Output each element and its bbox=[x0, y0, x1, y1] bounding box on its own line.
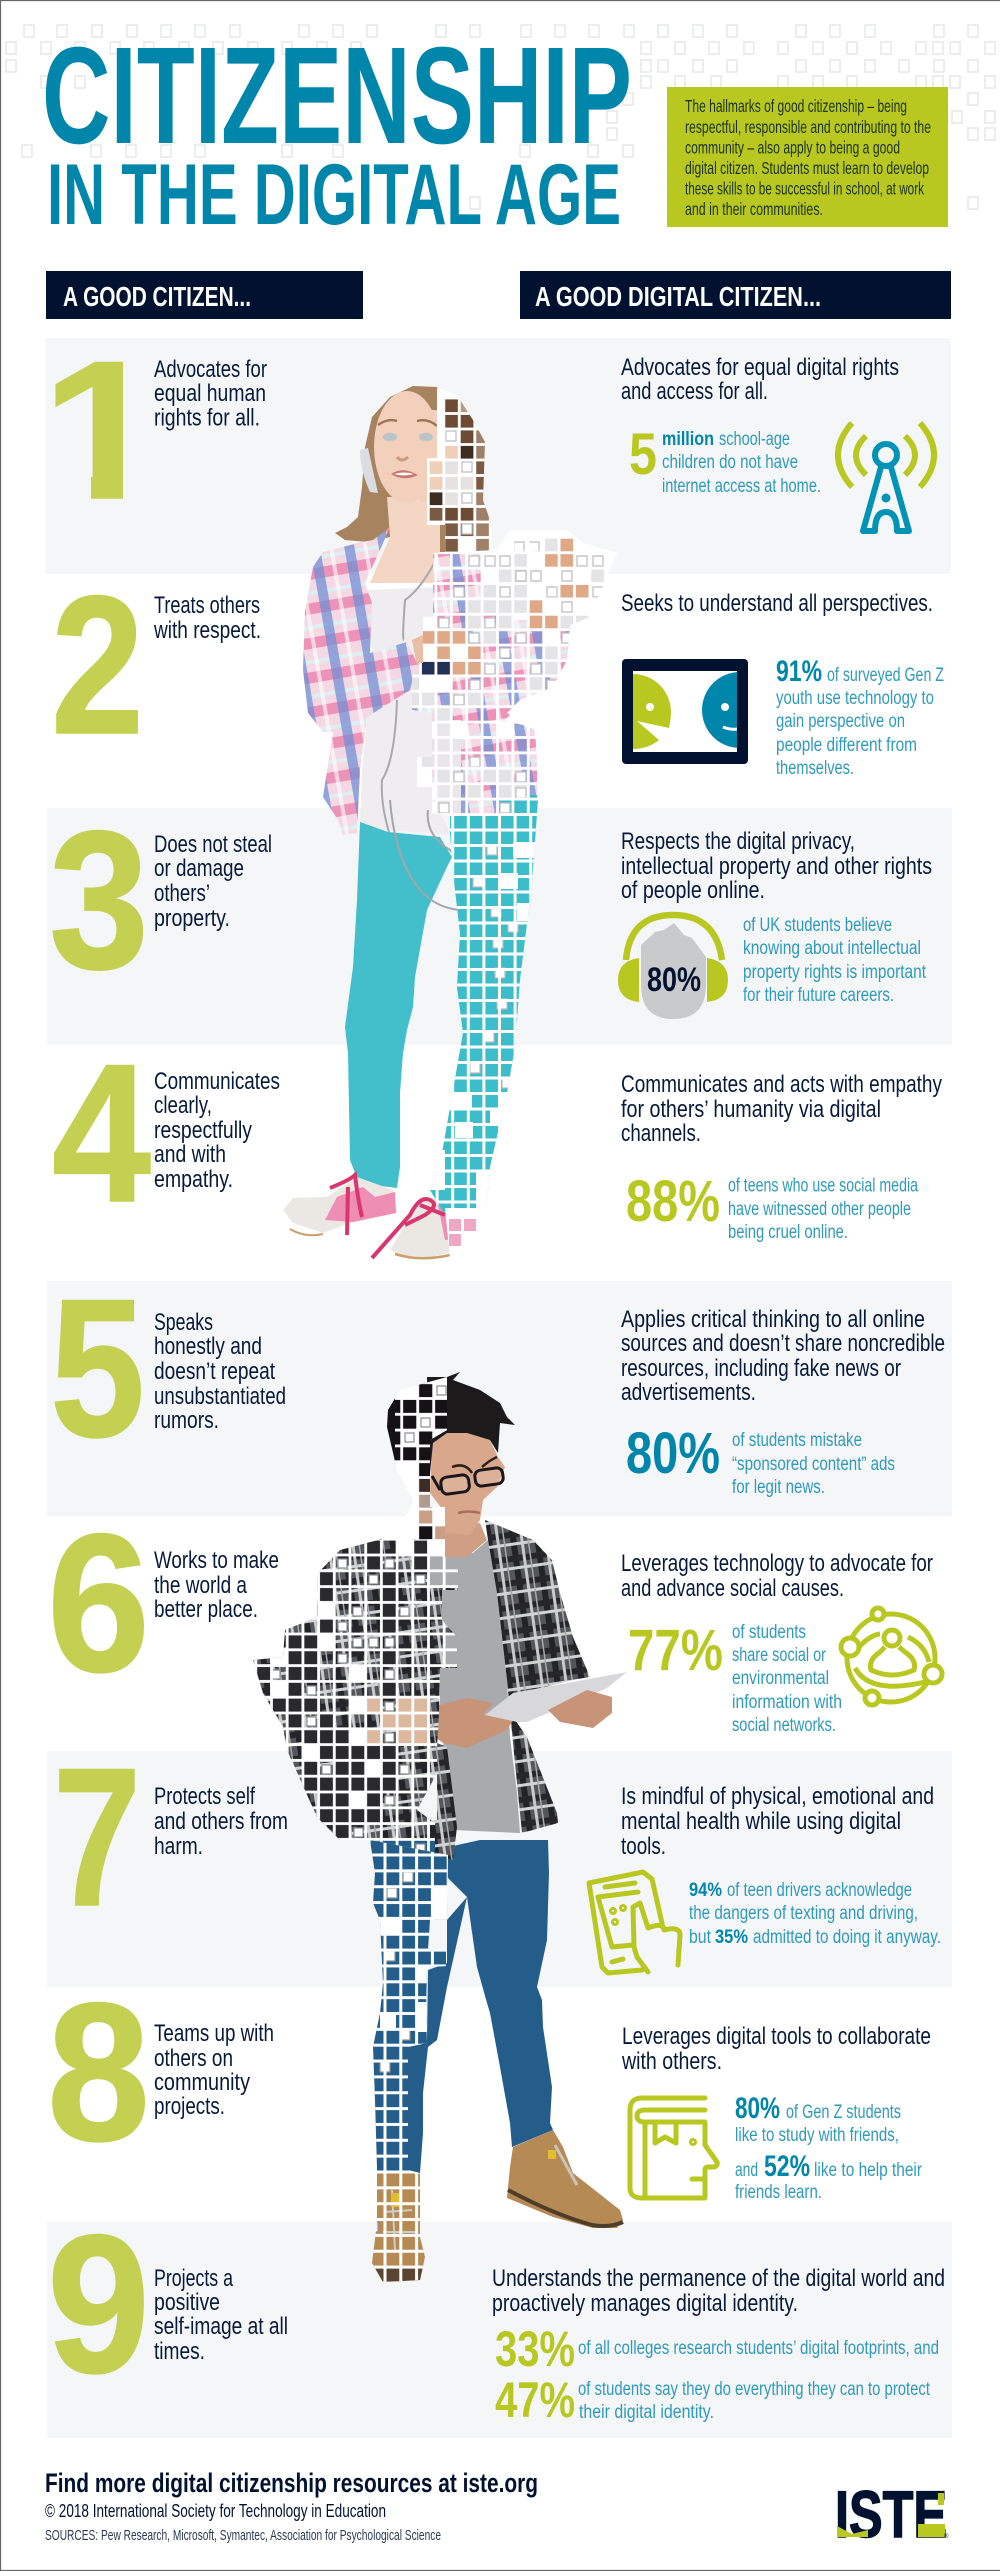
panel: item 2 digital citizen: youth use technology to bbox=[776, 688, 934, 709]
panel: item 4 good citizen: and with bbox=[154, 1141, 226, 1168]
panel: item 8 digital citizen: Leverages digital tools to collaborate bbox=[622, 2023, 931, 2050]
panel: item 1 digital citizen: and access for all. bbox=[621, 378, 768, 405]
panel: item 9 good citizen: Projects a bbox=[154, 2265, 233, 2292]
panel: item 8 digital citizen: 80% bbox=[735, 2092, 780, 2125]
panel: item 3 good citizen: or damage bbox=[154, 855, 244, 882]
panel: item 3 digital citizen: intellectual property and other rights bbox=[621, 853, 932, 880]
girl right shoe bbox=[372, 1197, 485, 1258]
tablet bbox=[485, 1672, 627, 1722]
row background bands bbox=[46, 338, 952, 2438]
icon: social network bbox=[841, 1608, 942, 1705]
footer text: Find more digital citizenship resources at iste.org bbox=[45, 2468, 538, 2498]
panel: item 3 digital citizen: for their future careers. bbox=[743, 985, 894, 1006]
panel: item 8 digital citizen: like to help their bbox=[814, 2160, 923, 2181]
panel: item 3 good citizen: 3 bbox=[49, 790, 149, 1010]
girl hair bbox=[335, 386, 445, 552]
panel: item 1 digital citizen: school-age bbox=[719, 429, 790, 450]
footer text: © 2018 International Society for Technology in Education bbox=[45, 2501, 386, 2521]
icon: tablet with two faces bbox=[622, 659, 748, 764]
boy hair bbox=[427, 1372, 515, 1473]
panel: item 6 digital citizen: and advance social causes. bbox=[621, 1575, 844, 1602]
girl jeans left leg bbox=[345, 822, 452, 1188]
girl hand bbox=[412, 634, 425, 665]
panel: item 5 digital citizen: Applies critical thinking to all online bbox=[621, 1306, 925, 1333]
panel: item 2 digital citizen: themselves. bbox=[776, 758, 854, 779]
panel: item 7 digital citizen: mental health while using digital bbox=[621, 1808, 901, 1835]
panel: item 4 digital citizen: have witnessed other people bbox=[728, 1199, 911, 1220]
boy mosaic hollow tiles bbox=[271, 1559, 425, 1853]
panel: item 7 good citizen: 7 bbox=[53, 1727, 141, 1947]
boy face bbox=[430, 1433, 505, 1535]
column header: a good digital citizen bbox=[520, 271, 951, 319]
column header: a good citizen: A GOOD CITIZEN... bbox=[63, 281, 251, 312]
panel: item 8 digital citizen: and bbox=[735, 2160, 758, 2181]
panel: item 7 good citizen: Protects self bbox=[154, 1783, 255, 1810]
panel: item 8 digital citizen: friends learn. bbox=[735, 2182, 822, 2203]
torso hollow tiles bbox=[439, 542, 603, 813]
boy jeans right leg bbox=[435, 1840, 553, 2147]
panel: item 5 good citizen: honestly and bbox=[154, 1333, 262, 1360]
panel: item 3 digital citizen bbox=[618, 828, 932, 1019]
panel: item 5 good citizen: rumors. bbox=[154, 1407, 219, 1434]
panel: item 7 digital citizen bbox=[589, 1783, 941, 1973]
icon: head with headphones 80%: 80% bbox=[647, 961, 701, 999]
panel: item 5 digital citizen bbox=[621, 1306, 945, 1498]
panel: item 9 digital citizen: their digital identity. bbox=[579, 2402, 714, 2423]
panel: item 3 digital citizen: knowing about intellectual bbox=[743, 938, 921, 959]
panel: item 7 digital citizen: admitted to doing it anyway. bbox=[753, 1927, 941, 1948]
panel: item 6 good citizen bbox=[47, 1493, 279, 1713]
leg hollow tiles bbox=[470, 845, 518, 1088]
girl left shoe bbox=[283, 1175, 397, 1235]
panel: item 4 good citizen: 4 bbox=[52, 1023, 151, 1243]
header background pixel pattern bbox=[6, 25, 995, 209]
panel: item 1 good citizen: rights for all. bbox=[154, 404, 260, 432]
panel: item 6 digital citizen bbox=[621, 1550, 942, 1736]
panel: item 9 digital citizen bbox=[492, 2265, 945, 2428]
panel: item 6 digital citizen: 77% bbox=[628, 1618, 723, 1683]
panel: item 6 digital citizen: social networks. bbox=[732, 1715, 836, 1736]
girl face bbox=[374, 391, 440, 503]
panel: item 4 good citizen: empathy. bbox=[154, 1166, 233, 1193]
panel: item 7 good citizen bbox=[53, 1727, 288, 1947]
panel: item 7 good citizen: and others from bbox=[154, 1808, 288, 1835]
panel: item 4 digital citizen bbox=[621, 1071, 942, 1243]
boy tee bbox=[440, 1540, 520, 1833]
footer text: SOURCES: Pew Research, Microsoft, Symantec, Association for Psychological Science bbox=[45, 2527, 441, 2544]
photo: boy, half photo half mosaic bbox=[245, 1370, 627, 2285]
boy boot right bbox=[507, 2130, 623, 2228]
panel: item 4 digital citizen: 88% bbox=[626, 1169, 720, 1234]
panel: item 4 digital citizen: channels. bbox=[621, 1120, 701, 1147]
panel: item 8 digital citizen: of Gen Z students bbox=[786, 2102, 901, 2123]
panel: item 8 digital citizen: 52% bbox=[764, 2150, 810, 2183]
icon: signal tower bbox=[838, 423, 934, 531]
panel: item 3 digital citizen: of people online. bbox=[621, 877, 765, 904]
boot lace detail bbox=[383, 2190, 415, 2250]
panel: item 2 digital citizen: 91% bbox=[776, 655, 822, 688]
girl shoe mosaic bbox=[445, 1208, 486, 1258]
panel: item 2 good citizen: Treats others bbox=[154, 592, 260, 619]
panel: item 6 good citizen: the world a bbox=[154, 1572, 248, 1599]
panel: item 3 digital citizen: of UK students believe bbox=[743, 915, 892, 936]
panel: item 7 digital citizen: of teen drivers acknowledge bbox=[727, 1880, 912, 1901]
panel: item 8 good citizen: projects. bbox=[154, 2093, 225, 2120]
icon: phone with tapping hand bbox=[589, 1872, 680, 1973]
girl plaid shirt bbox=[303, 527, 417, 835]
panel: item 8 good citizen: 8 bbox=[47, 1962, 150, 2182]
panel: item 2 good citizen: 2 bbox=[51, 555, 144, 775]
intro text box bbox=[667, 87, 948, 227]
panel: item 5 good citizen: doesn’t repeat bbox=[154, 1358, 275, 1385]
panel: item 1 good citizen: equal human bbox=[154, 380, 266, 407]
panel: item 1 digital citizen: 5 bbox=[629, 422, 657, 487]
panel: item 3 digital citizen: property rights is important bbox=[743, 962, 927, 983]
panel: item 7 good citizen: harm. bbox=[154, 1833, 203, 1860]
panel: item 8 good citizen: community bbox=[154, 2069, 250, 2096]
panel: item 7 digital citizen: but bbox=[689, 1927, 712, 1948]
boy right hand bbox=[548, 1690, 612, 1728]
panel: item 9 digital citizen: 47% bbox=[495, 2372, 575, 2428]
panel: item 1 digital citizen: children do not have bbox=[662, 452, 798, 473]
footer text bbox=[45, 2468, 538, 2544]
panel: item 3 good citizen bbox=[49, 790, 272, 1010]
panel: item 9 good citizen: 9 bbox=[47, 2194, 150, 2414]
boy lower leg mosaic bbox=[370, 1840, 448, 2282]
panel: item 6 digital citizen: information with bbox=[732, 1692, 842, 1713]
panel: item 1 digital citizen: million bbox=[662, 429, 714, 450]
girl neck and chest bbox=[370, 497, 440, 583]
panel: item 7 digital citizen: 94% bbox=[689, 1880, 722, 1901]
panel: item 7 digital citizen: Is mindful of physical, emotional and bbox=[621, 1783, 934, 1810]
panel: item 6 digital citizen: of students bbox=[732, 1622, 806, 1643]
panel: item 2 digital citizen: gain perspective on bbox=[776, 711, 905, 732]
panel: item 6 good citizen: 6 bbox=[47, 1493, 150, 1713]
girl head mosaic bbox=[427, 388, 492, 552]
panel: item 4 good citizen: clearly, bbox=[154, 1092, 212, 1119]
panel: item 4 good citizen: respectfully bbox=[154, 1117, 252, 1144]
title bbox=[42, 19, 632, 243]
boy neck bbox=[443, 1523, 487, 1557]
panel: item 3 digital citizen: Respects the digital privacy, bbox=[621, 828, 855, 855]
column header: a good digital citizen: A GOOD DIGITAL CITIZEN... bbox=[535, 281, 821, 312]
leg missing tiles bbox=[375, 1886, 448, 2032]
panel: item 2 good citizen bbox=[51, 555, 261, 775]
title: IN THE DIGITAL AGE bbox=[47, 147, 621, 243]
panel: item 7 digital citizen: 35% bbox=[715, 1927, 748, 1948]
panel: item 4 digital citizen: for others’ humanity via digital bbox=[621, 1096, 881, 1123]
girl wire over jeans bbox=[390, 800, 475, 910]
panel: item 1 digital citizen: Advocates for equal digital rights bbox=[621, 354, 899, 381]
title: CITIZENSHIP bbox=[42, 19, 632, 173]
intro text box: and in their communities. bbox=[685, 199, 823, 219]
panel: item 1 good citizen bbox=[56, 360, 267, 499]
panel: item 6 good citizen: better place. bbox=[154, 1596, 258, 1623]
panel: item 5 good citizen: Speaks bbox=[154, 1309, 213, 1336]
panel: item 2 digital citizen bbox=[621, 590, 944, 779]
panel: item 5 digital citizen: 80% bbox=[626, 1421, 720, 1486]
panel: item 5 good citizen: unsubstantiated bbox=[154, 1383, 286, 1410]
panel: item 7 digital citizen: tools. bbox=[621, 1833, 666, 1860]
panel: item 4 good citizen: Communicates bbox=[154, 1068, 280, 1095]
panel: item 1 good citizen: 1 bbox=[41, 320, 166, 540]
panel: item 2 digital citizen: of surveyed Gen Z bbox=[827, 665, 944, 686]
panel: item 6 digital citizen: environmental bbox=[732, 1668, 829, 1689]
logo: ISTE: ISTE bbox=[835, 2477, 947, 2551]
panel: item 7 digital citizen: the dangers of texting and driving, bbox=[689, 1903, 918, 1924]
boy plaid shirt right bbox=[485, 1520, 590, 1833]
panel: item 9 good citizen: positive bbox=[154, 2289, 220, 2316]
panel: item 3 good citizen: others’ bbox=[154, 880, 210, 907]
boy upper body mosaic bbox=[253, 1377, 458, 1852]
panel: item 8 good citizen bbox=[47, 1962, 274, 2182]
photo: girl, half photo half mosaic bbox=[283, 380, 625, 1258]
panel: item 5 digital citizen: of students mistake bbox=[732, 1430, 862, 1451]
panel: item 4 good citizen bbox=[52, 1023, 280, 1243]
girl earphone wire bbox=[382, 560, 436, 850]
icon: head with headphones 80% bbox=[618, 915, 728, 1019]
panel: item 4 digital citizen: of teens who use social media bbox=[728, 1176, 918, 1196]
panel: item 8 digital citizen: like to study with friends, bbox=[735, 2125, 899, 2146]
girl right leg mosaic bbox=[430, 800, 538, 1212]
girl headphones bbox=[360, 448, 378, 493]
panel: item 1 digital citizen bbox=[621, 354, 934, 531]
panel: item 5 digital citizen: for legit news. bbox=[732, 1477, 825, 1498]
panel: item 5 good citizen: 5 bbox=[50, 1258, 145, 1478]
boy forearm and hand holding tablet bbox=[430, 1698, 515, 1748]
panel: item 5 digital citizen: resources, including fake news or bbox=[621, 1355, 901, 1382]
panel: item 5 digital citizen: advertisements. bbox=[621, 1379, 756, 1406]
panel: item 3 good citizen: Does not steal bbox=[154, 831, 272, 858]
panel: item 2 digital citizen: people different from bbox=[776, 735, 917, 756]
column header: a good citizen bbox=[46, 271, 363, 319]
panel: item 9 digital citizen: 33% bbox=[495, 2321, 575, 2377]
logo: ISTE: ® bbox=[944, 2533, 949, 2540]
panel: item 2 good citizen: with respect. bbox=[153, 617, 261, 644]
girl white t-shirt bbox=[360, 587, 452, 835]
panel: item 8 good citizen: Teams up with bbox=[154, 2020, 274, 2047]
panel: item 6 digital citizen: share social or bbox=[732, 1645, 827, 1666]
boy plaid shirt lower front bbox=[376, 1743, 457, 1860]
panel: item 8 good citizen: others on bbox=[154, 2045, 233, 2072]
panel: item 4 digital citizen: being cruel online. bbox=[728, 1222, 848, 1243]
head hollow tiles bbox=[446, 431, 472, 534]
panel: item 9 digital citizen: proactively manages digital identity. bbox=[492, 2290, 798, 2317]
panel: item 5 digital citizen: “sponsored content” ads bbox=[732, 1454, 895, 1475]
intro text box: The hallmarks of good citizenship – being bbox=[685, 96, 907, 116]
panel: item 3 good citizen: property. bbox=[154, 905, 230, 932]
panel: item 5 good citizen bbox=[50, 1258, 286, 1478]
boy jeans left leg photo strip bbox=[408, 1897, 467, 2177]
panel: item 6 good citizen: Works to make bbox=[154, 1547, 279, 1574]
leg hollow tiles bbox=[372, 1872, 413, 2232]
panel: item 9 good citizen bbox=[47, 2194, 288, 2414]
panel: item 8 digital citizen bbox=[621, 2023, 931, 2203]
panel: item 8 digital citizen: with others. bbox=[621, 2048, 722, 2075]
panel: item 9 good citizen: times. bbox=[154, 2338, 205, 2365]
panel: item 1 good citizen: Advocates for bbox=[154, 356, 267, 383]
panel: item 9 good citizen: self-image at all bbox=[154, 2313, 288, 2340]
girl torso mosaic bbox=[405, 525, 625, 820]
intro text box: community – also apply to being a good bbox=[685, 138, 900, 158]
missing leg tiles bbox=[430, 842, 538, 1210]
icon: book with head profile bbox=[630, 2098, 717, 2198]
panel: item 1 digital citizen: internet access at home. bbox=[662, 476, 821, 497]
